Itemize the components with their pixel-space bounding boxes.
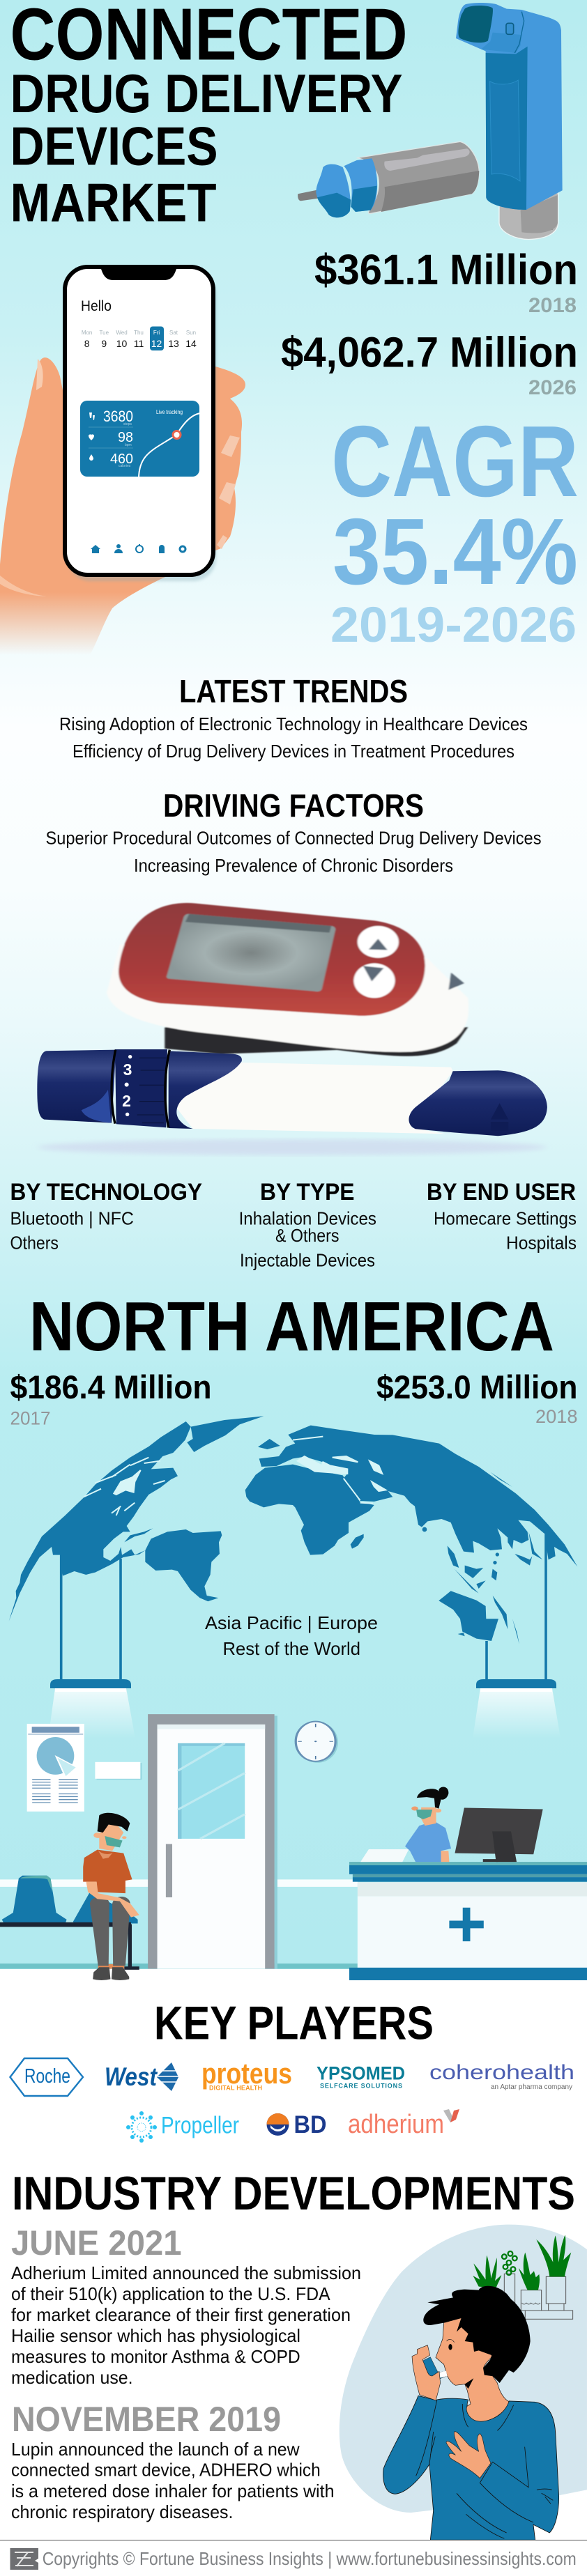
- other regions: Rest of the World: [223, 1638, 360, 1659]
- driving factors: [46, 787, 541, 876]
- logo: Propeller: [126, 2111, 239, 2143]
- logo: Cohero Health: [429, 2061, 574, 2091]
- logo: Ypsomed: SELFCARE SOLUTIONS: [320, 2082, 402, 2089]
- glucose meter: [107, 903, 468, 1056]
- icon: inhaler: [456, 3, 563, 239]
- waiting chairs: [0, 1876, 139, 1970]
- South America: [145, 1529, 222, 1601]
- development: November 2019: [11, 2400, 335, 2522]
- development: June 2021: [11, 2223, 361, 2388]
- driving factors: Increasing Prevalence of Chronic Disorders: [134, 855, 453, 876]
- logo: Ypsomed: YPSOMED: [317, 2062, 405, 2083]
- development: November 2019: NOVEMBER 2019: [12, 2400, 281, 2439]
- phone: 11: [134, 338, 144, 349]
- phone: 13: [168, 338, 179, 349]
- market value stats: $361.1 Million: [314, 246, 578, 293]
- segment: by type: Injectable Devices: [240, 1250, 375, 1271]
- photo: glucose meter and lancet pen: [37, 903, 547, 1155]
- door: [148, 1714, 277, 1969]
- phone: Tue: [100, 330, 109, 336]
- North America values: $186.4 Million: [10, 1368, 212, 1405]
- CAGR: [330, 405, 579, 653]
- other regions: Asia Pacific | Europe: [205, 1612, 378, 1633]
- phone: 9: [101, 338, 107, 349]
- North America values: [10, 1368, 577, 1428]
- health card: bpm: [125, 443, 132, 447]
- world map: [9, 1416, 577, 1644]
- health card: 98: [118, 430, 133, 445]
- phone: Sat: [169, 330, 178, 336]
- dial numbers: 2: [122, 1092, 131, 1110]
- islands: [258, 1439, 542, 1644]
- title: [10, 0, 407, 233]
- icon: canister: [298, 141, 479, 217]
- development: June 2021: JUNE 2021: [11, 2223, 181, 2262]
- market value stats: 2026: [528, 376, 577, 399]
- logo: proteus: proteus: [201, 2057, 292, 2090]
- development: November 2019: is a metered dose inhaler for patients with: [11, 2481, 335, 2501]
- logo: Roche: [10, 2058, 83, 2096]
- wall stripe and baseboard: [0, 1879, 358, 1969]
- phone: 12: [151, 338, 162, 349]
- driving factors: Superior Procedural Outcomes of Connected Drug Delivery Devices: [46, 828, 541, 849]
- health card: Live tracking: [156, 408, 183, 415]
- phone: Mon: [82, 330, 92, 336]
- phone: 10: [116, 338, 127, 349]
- phone: Sun: [186, 330, 196, 336]
- segment: by technology: Others: [10, 1232, 59, 1253]
- seated patient: [83, 1813, 139, 1980]
- icon: hand: [0, 357, 245, 655]
- development: June 2021: of their 510(k) application to the U.S. FDA: [11, 2283, 330, 2304]
- wall sign: [95, 1762, 142, 1780]
- health card: steps: [123, 422, 132, 426]
- dial numbers: [122, 1061, 132, 1110]
- phone: Fri: [153, 330, 160, 336]
- phone navigation icons: [91, 544, 185, 553]
- latest trends: Efficiency of Drug Delivery Devices in Treatment Procedures: [73, 741, 514, 762]
- Caribbean islands: [124, 1528, 153, 1542]
- health card: calories: [119, 464, 131, 468]
- backdrop blob: [340, 2225, 587, 2513]
- wall clock: [296, 1722, 338, 1763]
- Eurasia: [259, 1426, 577, 1566]
- development: June 2021: Hailie sensor which has physiological: [11, 2325, 300, 2346]
- latest trends: LATEST TRENDS: [179, 673, 408, 709]
- Africa: [245, 1465, 374, 1555]
- reception desk: [349, 1862, 587, 1980]
- other regions: [205, 1612, 378, 1659]
- health card: 3680: [103, 408, 133, 425]
- logo: Cohero Health: an Aptar pharma company: [491, 2083, 573, 2091]
- logo: Propeller: Propeller: [161, 2113, 239, 2139]
- CAGR: 2019-2026: [330, 598, 577, 653]
- North America: [9, 1421, 191, 1621]
- segment: by end user: [427, 1179, 577, 1253]
- segment: by end user: BY END USER: [427, 1179, 576, 1205]
- background: [0, 0, 587, 1969]
- segment: by technology: BY TECHNOLOGY: [10, 1179, 202, 1205]
- development: June 2021: for market clearance of their first generation: [11, 2304, 351, 2325]
- logo: Roche: Roche: [24, 2065, 70, 2088]
- latest trends: Rising Adoption of Electronic Technology in Healthcare Devices: [59, 714, 528, 734]
- driving factors: DRIVING FACTORS: [163, 787, 424, 824]
- Australia: [439, 1591, 498, 1641]
- phone: [65, 267, 216, 581]
- segment: by type: & Others: [275, 1225, 339, 1246]
- market value stats: [281, 246, 578, 399]
- icon: hand holding phone: [0, 267, 245, 655]
- phone: Wed: [116, 330, 128, 336]
- development: June 2021: Adherium Limited announced the submission: [11, 2262, 361, 2283]
- logo: Fortune Business Insights: [10, 2548, 38, 2570]
- inhaler in hand: [422, 2357, 447, 2381]
- icon: medical cross: [449, 1908, 484, 1941]
- poster: [27, 1724, 84, 1812]
- hospital reception scene: [0, 1714, 587, 1980]
- segment: by end user: Homecare Settings: [434, 1208, 577, 1229]
- health card: [80, 401, 200, 479]
- person: [383, 2286, 559, 2540]
- icon: inhaler and canister: [298, 3, 563, 239]
- plants on shelf: [473, 2235, 573, 2319]
- logo: Cohero Health: coherohealth: [429, 2061, 574, 2084]
- title: MARKET: [10, 171, 216, 233]
- development: November 2019: chronic respiratory diseases.: [11, 2501, 233, 2522]
- latest trends: [59, 673, 528, 762]
- development: June 2021: medication use.: [11, 2367, 133, 2388]
- segment: by type: BY TYPE: [260, 1179, 354, 1205]
- heading: key players: KEY PLAYERS: [154, 1997, 434, 2050]
- Canadian inland waters: [84, 1458, 165, 1515]
- North America values: $253.0 Million: [376, 1368, 577, 1405]
- segment: by end user: Hospitals: [506, 1232, 577, 1253]
- logo: West: West: [105, 2062, 158, 2091]
- inland seas: [293, 1437, 386, 1504]
- lancet pen: [37, 1049, 547, 1136]
- phone: Hello: [81, 298, 112, 314]
- segment: by technology: [10, 1179, 202, 1253]
- ceiling lamps: [48, 1534, 561, 1738]
- market value stats: $4,062.7 Million: [281, 329, 578, 376]
- segment: by type: Inhalation Devices: [239, 1208, 376, 1229]
- key player logos: [10, 2057, 574, 2143]
- North America values: 2018: [535, 1406, 577, 1427]
- development: June 2021: measures to monitor Asthma & COPD: [11, 2346, 300, 2367]
- segment: by technology: Bluetooth | NFC: [10, 1208, 134, 1229]
- Greenland: [187, 1416, 264, 1452]
- phone: 14: [185, 338, 197, 349]
- phone: Thu: [134, 330, 144, 336]
- person using inhaler illustration: [340, 2225, 587, 2540]
- title: DRUG DELIVERY: [10, 63, 403, 124]
- segment: by type: [239, 1179, 376, 1271]
- development: November 2019: connected smart device, ADHERO which: [11, 2460, 321, 2481]
- dial numbers: 3: [123, 1061, 132, 1079]
- health card: 460: [110, 452, 133, 467]
- logo: proteus: DIGITAL HEALTH: [209, 2085, 262, 2092]
- North America values: 2017: [10, 1407, 50, 1428]
- development: November 2019: Lupin announced the launch of a new: [11, 2439, 300, 2460]
- logo: BD: [266, 2111, 326, 2138]
- logo: BD: BD: [294, 2111, 326, 2138]
- receptionist and computer: [360, 1787, 543, 1862]
- logo: adherium: adherium: [348, 2110, 444, 2139]
- market value stats: 2018: [528, 294, 577, 317]
- phone: 8: [84, 338, 90, 349]
- footer: [0, 2540, 587, 2570]
- title: DEVICES: [10, 116, 218, 177]
